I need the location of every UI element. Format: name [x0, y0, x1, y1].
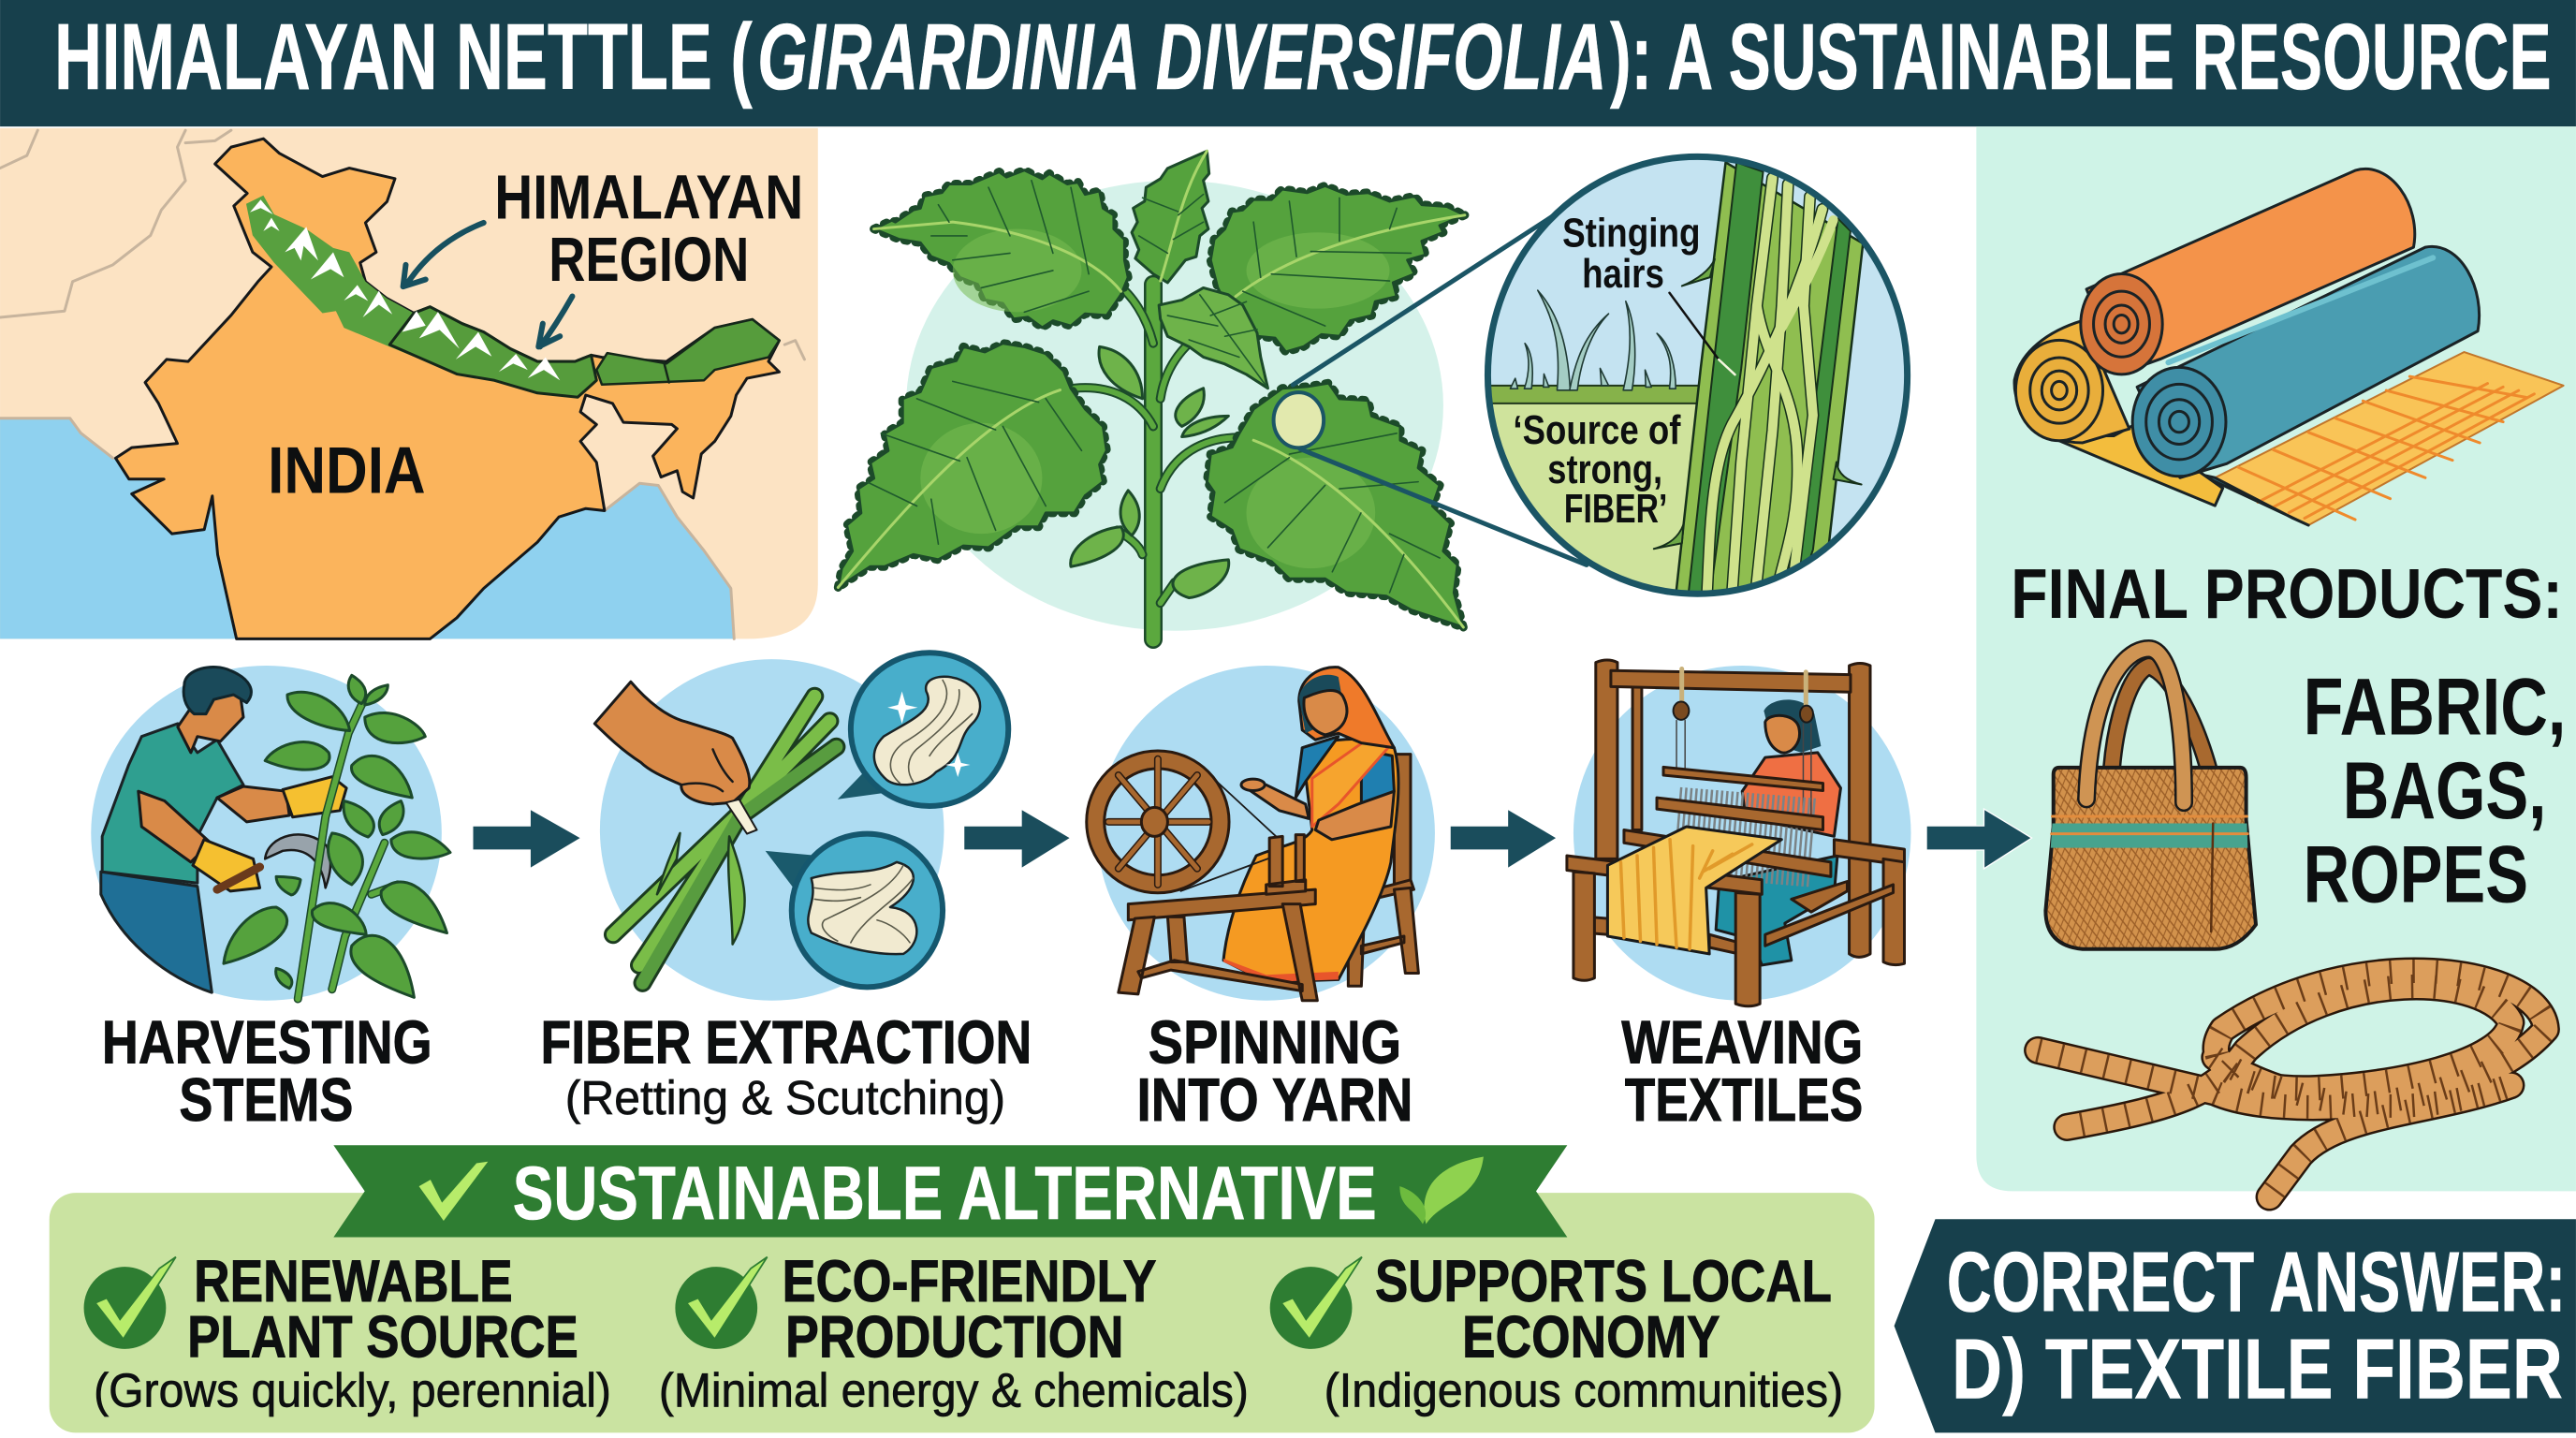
sea [0, 418, 734, 638]
icon: nettle plants [224, 675, 450, 999]
panel: sustainable alternative [50, 1145, 1875, 1432]
item: local economy: SUPPORTS LOCAL [1375, 1249, 1832, 1314]
icon: check badge [1270, 1257, 1362, 1349]
icon: stems in hand [594, 659, 944, 1001]
arrow: step 3 to 4 [1451, 810, 1556, 868]
label: harvesting stems: HARVESTING [102, 1008, 432, 1077]
panel: final products [1976, 126, 2576, 1197]
front legs [1573, 872, 1594, 980]
label: spinning into yarn: SPINNING [1149, 1008, 1401, 1077]
arrow: step 4 to products [1927, 810, 2030, 868]
bench [1128, 889, 1315, 920]
fibrous stem [1676, 162, 1863, 599]
icon: woven bag [2045, 649, 2256, 949]
head [1299, 668, 1394, 748]
pointer [1670, 293, 1719, 360]
icon: check [419, 1162, 488, 1221]
cloth [1607, 827, 1781, 954]
snow peaks [250, 199, 560, 380]
stem and branches [1075, 285, 1253, 639]
weaver [1716, 856, 1837, 965]
icon: harvester [91, 666, 442, 1001]
label: weaving textiles: WEAVING [1621, 1008, 1863, 1077]
map labels: REGION [549, 226, 749, 295]
label: spinning into yarn [1137, 1008, 1412, 1134]
icon: leaf [1399, 1157, 1484, 1224]
wheel [1095, 759, 1221, 884]
step: harvesting stems [91, 666, 450, 1134]
leaf: upper left [874, 170, 1128, 328]
item: renewable [84, 1249, 611, 1416]
step: fiber extraction [540, 653, 1032, 1124]
label: fiber extraction [540, 1008, 1032, 1124]
icon: spinner and wheel [1095, 666, 1435, 1001]
leaf: centre small [1159, 287, 1267, 389]
icon: coiled rope [2038, 971, 2546, 1197]
map background [0, 128, 818, 638]
chair [1394, 755, 1411, 885]
item: renewable: RENEWABLE [194, 1249, 513, 1314]
magnifier text: strong, [1547, 447, 1662, 492]
step: spinning into yarn [1095, 666, 1435, 1134]
sari [1223, 740, 1398, 982]
label: harvesting stems [102, 1008, 432, 1134]
leaf: upper right [1210, 185, 1465, 352]
loom posts [1596, 660, 1617, 858]
item: renewable: (Grows quickly, perennial) [94, 1363, 611, 1416]
title banner: GIRARDINIA DIVERSIFOLIA [757, 5, 1606, 110]
warp threads [1676, 831, 1814, 843]
soil and label ground [1493, 404, 1696, 590]
title banner: HIMALAYAN NETTLE ( [54, 5, 753, 110]
label: fiber extraction: FIBER EXTRACTION [540, 1008, 1032, 1077]
item: eco-friendly: PRODUCTION [785, 1305, 1123, 1371]
item: eco-friendly: ECO-FRIENDLY [782, 1249, 1157, 1314]
icon: weaver at loom [1567, 660, 1911, 1006]
Himalayan band [246, 196, 596, 397]
stinging hairs [1510, 290, 1676, 390]
label: harvesting stems: STEMS [179, 1065, 353, 1134]
magnifier text [1513, 210, 1701, 532]
label: weaving textiles: TEXTILES [1625, 1065, 1863, 1134]
label: weaving textiles [1621, 1008, 1863, 1134]
item: local economy: (Indigenous communities) [1325, 1363, 1843, 1416]
India outline [115, 139, 779, 638]
small leaves [1071, 346, 1229, 598]
magnifier text: ‘Source of [1513, 407, 1681, 453]
arrow: step 2 to 3 [964, 810, 1070, 868]
label: spinning into yarn: INTO YARN [1137, 1065, 1412, 1134]
stem thorns [1682, 259, 1715, 286]
magnifier text: FIBER’ [1564, 486, 1667, 532]
arrows to Himalayan region [403, 223, 572, 346]
banner: SUSTAINABLE ALTERNATIVE [513, 1152, 1377, 1236]
products text [2011, 554, 2566, 920]
map labels: HIMALAYAN [494, 163, 803, 232]
magnifier text: hairs [1582, 251, 1664, 297]
item: renewable: PLANT SOURCE [187, 1305, 578, 1371]
panel: map of India [0, 128, 818, 638]
item: eco-friendly [659, 1249, 1249, 1416]
front frame [1567, 856, 1762, 894]
icon: fabric rolls [2014, 169, 2564, 525]
callout ring on leaf [1274, 392, 1324, 448]
icon: check badge [84, 1257, 176, 1349]
icon: fiber bubble top [838, 653, 1008, 806]
callout: correct answer [1895, 1219, 2576, 1432]
item: local economy: ECONOMY [1462, 1305, 1720, 1371]
map labels [268, 163, 803, 507]
leaf: lower left [838, 344, 1106, 587]
title banner [0, 0, 2576, 126]
magnifier text: Stinging [1562, 210, 1701, 256]
item: eco-friendly: (Minimal energy & chemicals) [659, 1363, 1249, 1416]
map labels: INDIA [268, 433, 426, 507]
heddle bars [1663, 767, 1823, 790]
label: fiber extraction: (Retting & Scutching) [565, 1071, 1005, 1124]
icon: fiber bubble bottom [766, 834, 943, 987]
magnified stem callout [1486, 156, 1908, 603]
leaf: top centre [1132, 151, 1209, 283]
plant halo [906, 181, 1443, 631]
plant illustration [838, 151, 1465, 639]
icon: check badge [675, 1257, 768, 1349]
leaf: lower right [1207, 383, 1463, 627]
magnifier callout lines [1293, 215, 1587, 565]
step: weaving textiles [1567, 660, 1911, 1134]
item: local economy [1270, 1249, 1843, 1416]
arrow: step 1 to 2 [474, 810, 580, 868]
